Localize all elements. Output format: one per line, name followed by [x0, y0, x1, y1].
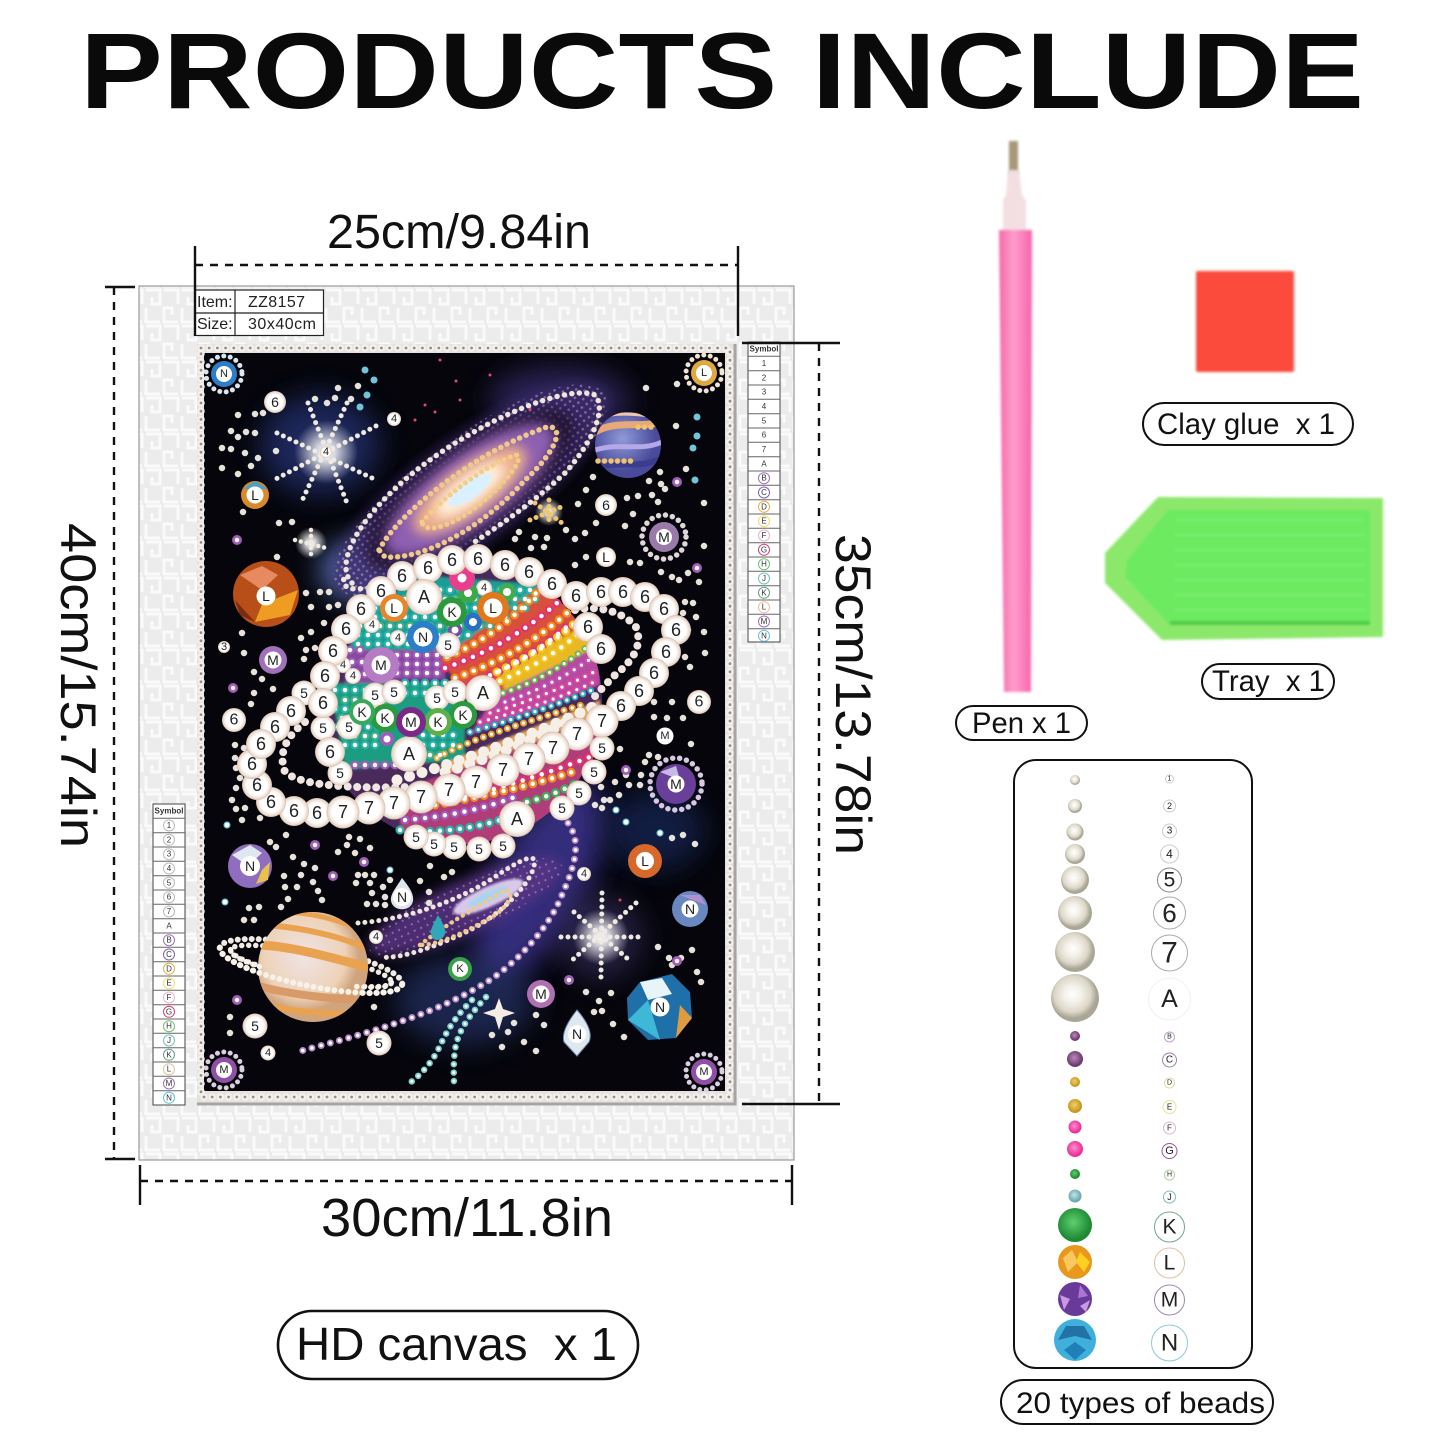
artwork: space painting [197, 344, 737, 1104]
big pearl beads with 7: 7 [572, 724, 582, 744]
coloured gem beads on the planet: N [418, 629, 428, 645]
lone 6 beads [222, 391, 711, 732]
corner gem M right [686, 1054, 722, 1090]
pearl 4 and L labels: 4 [323, 446, 329, 458]
gem: M ring lower: M [670, 776, 682, 792]
small pearl and gem details on planet: 4 [350, 670, 356, 682]
big pearl beads with 6: 6 [671, 620, 681, 640]
gem: M ring lower [650, 758, 702, 810]
big pearl beads with 7: 7 [471, 772, 481, 792]
symbol table right: Symbol [750, 344, 778, 354]
symbol table left: B [166, 936, 172, 945]
big pearl beads with 6: 6 [356, 599, 366, 619]
big pearl beads with 5: 5 [590, 764, 598, 780]
big pearl beads with 5: 5 [336, 765, 344, 781]
big pearl beads with 6: 6 [634, 681, 644, 701]
planet: striped blue top right [595, 412, 662, 478]
symbol letters column: F [1167, 1124, 1172, 1132]
symbol circles column [1148, 775, 1190, 1361]
planet: ringed Saturn [216, 912, 406, 1022]
gem: N droplet: N [397, 889, 407, 905]
big pearl beads with 7: 7 [444, 780, 454, 800]
symbol table right [748, 342, 780, 642]
scattered named gems [206, 355, 722, 1090]
big pearl beads with 5: 5 [575, 785, 583, 801]
pen translucent collar [1003, 170, 1026, 232]
label: HD canvas: HD canvas x 1 [296, 1318, 617, 1370]
big pearl beads with 5 [242, 632, 614, 1056]
pearl 4 and L labels: 4 [581, 868, 587, 880]
dimension: width 30cm: 30cm/11.8in [321, 1188, 613, 1248]
symbol table left: N [166, 1093, 172, 1102]
symbol letters column [1161, 776, 1178, 1356]
big A pearls: A [511, 809, 523, 829]
coloured gem beads on the planet: K [447, 604, 457, 620]
gem: N teardrop: N [572, 1026, 582, 1042]
symbol table right: B [761, 474, 767, 483]
lone 6 beads: 6 [230, 712, 239, 728]
pearl 4 and L labels: 4 [265, 1047, 271, 1059]
lone 6 beads: 6 [271, 394, 279, 410]
symbol table left: 7 [167, 907, 172, 916]
symbol table left: J [167, 1036, 171, 1045]
big pearl beads with 7: 7 [524, 749, 534, 769]
item and size table: Item: [197, 294, 233, 311]
big pearl beads with 5: 5 [390, 684, 398, 700]
bead M purple gem [1058, 1282, 1092, 1316]
big pearl beads with 5: 5 [300, 685, 308, 701]
big pearl beads with 5: 5 [412, 829, 420, 845]
tray [1105, 497, 1383, 640]
big pearl beads with 6: 6 [500, 555, 510, 575]
dimension: height 35cm [742, 343, 881, 1104]
big pearl beads with 5: 5 [345, 719, 353, 735]
canvas paper sheet [139, 286, 794, 1160]
big pearl beads with 6: 6 [397, 566, 407, 586]
gem: L orange: L [641, 853, 649, 869]
dimension: width 30cm [140, 1165, 792, 1248]
gem: M pink [527, 980, 555, 1008]
clay glue block [1196, 271, 1294, 372]
sparkle stars [274, 403, 640, 1030]
planet: faceted orange L: L [262, 588, 270, 604]
coloured gem beads on the planet: M [375, 657, 387, 673]
symbol table right: 6 [762, 431, 767, 440]
big pearl beads with 6: 6 [571, 586, 581, 606]
big pearl beads with 6: 6 [328, 641, 338, 661]
symbol table right: J [762, 574, 766, 583]
gem: N droplet [391, 878, 413, 909]
small pearl and gem details on planet: 4 [340, 659, 346, 671]
big A pearls: A [403, 744, 415, 764]
symbol letters column: 6 [1162, 898, 1177, 928]
small pearl and gem details on planet: 4 [395, 632, 401, 644]
gem: L small [241, 481, 269, 509]
pearl border [201, 348, 730, 1097]
big pearl beads with 7: 7 [597, 711, 607, 731]
small pearl and gem details on planet: 4 [369, 619, 375, 631]
big A pearls: A [418, 587, 430, 607]
big pearl beads with 5: 5 [375, 1035, 383, 1051]
big pearl beads with 5: 5 [433, 690, 441, 706]
symbol letters column: 2 [1167, 801, 1172, 811]
big pearl beads with 5: 5 [251, 1018, 259, 1034]
scattered pearl dots [222, 384, 705, 1051]
big pearl beads with 6: 6 [596, 639, 606, 659]
pen pink barrel [999, 230, 1032, 692]
symbol table left: H [166, 1022, 172, 1031]
gem: N teardrop [563, 1010, 590, 1056]
big pearl beads with 5: 5 [558, 800, 566, 816]
coloured gem beads on the planet: K [433, 714, 443, 730]
symbol letters column: 1 [1168, 776, 1172, 782]
label: 20 types of beads [1001, 1380, 1273, 1424]
gem: N purple facet [228, 844, 272, 888]
big pearl beads with 6: 6 [640, 587, 650, 607]
gem: N blue large [627, 974, 692, 1040]
gem: K green [448, 957, 472, 981]
big pearl beads with 6: 6 [649, 663, 659, 683]
big pearl beads with 6: 6 [596, 582, 606, 602]
symbol letters column: D [1167, 1080, 1172, 1086]
bead L amber gem [1058, 1245, 1092, 1279]
dimension: width 25cm: 25cm/9.84in [327, 206, 591, 259]
big pearl beads with 5: 5 [499, 838, 507, 854]
symbol table right: 5 [762, 416, 767, 425]
corner gem N: N [220, 368, 228, 380]
bead bands [335, 590, 590, 831]
symbol letters column: G [1165, 1145, 1174, 1157]
symbol table right: E [761, 517, 767, 526]
bead K green [1058, 1208, 1092, 1242]
coloured gem beads on the planet: M [405, 714, 417, 730]
planet: faceted orange L [233, 561, 299, 627]
coloured gem beads on the planet: L [489, 600, 497, 616]
big pearl beads with 6: 6 [266, 792, 276, 812]
corner gem L: L [701, 367, 707, 379]
symbol table right: 3 [762, 388, 767, 397]
small pearl and gem details on planet: 4 [481, 582, 487, 594]
gem: N small facet [672, 891, 708, 927]
big pearl beads with 6: 6 [376, 581, 386, 601]
dimension: height 35cm: 35cm/13.78in [825, 534, 881, 855]
pearl 4 and L labels: 4 [391, 413, 397, 425]
symbol letters column: 5 [1164, 868, 1175, 892]
pen metal tip [1009, 141, 1018, 175]
symbol table left: 4 [167, 864, 172, 873]
big pearl beads with 7: 7 [338, 802, 348, 822]
symbol table right: 4 [762, 402, 767, 411]
big pearl beads with 6: 6 [325, 742, 335, 762]
symbol table left: C [166, 950, 172, 959]
symbol table right: L [762, 603, 767, 612]
symbol table right: C [761, 488, 767, 497]
gem: M ring [642, 515, 686, 559]
big pearl beads with 6: 6 [247, 754, 257, 774]
corner gem M right: M [699, 1066, 709, 1078]
big pearl beads with 7: 7 [364, 798, 374, 818]
symbol table left: F [167, 993, 172, 1002]
label: pen: Pen x 1 [972, 707, 1071, 740]
symbol table left: A [166, 921, 172, 930]
title: PRODUCTS INCLUDE [80, 10, 1364, 131]
symbol table left [153, 804, 185, 1105]
symbol table left: Symbol [155, 806, 183, 816]
symbol table left: E [166, 979, 172, 988]
symbol letters column: J [1167, 1192, 1172, 1202]
symbol table right: F [762, 531, 767, 540]
big pearl beads with 7: 7 [416, 787, 426, 807]
gem: L small: L [251, 487, 259, 503]
item and size table: Size: [197, 316, 233, 333]
gem: M purple [259, 646, 287, 674]
big pearl beads with 5: 5 [475, 841, 483, 857]
item and size table: ZZ8157 [248, 294, 305, 311]
big pearl beads with 5: 5 [371, 687, 379, 703]
panel: bead legend [1014, 760, 1252, 1368]
big pearl beads with 6: 6 [447, 550, 457, 570]
coloured gem beads on the planet: L [390, 600, 398, 616]
label: clay glue [1143, 403, 1353, 445]
coloured small beads column [1067, 1031, 1083, 1202]
big pearl beads with 5: 5 [430, 836, 438, 852]
symbol table right: 2 [762, 373, 767, 382]
symbol table left: 2 [167, 835, 172, 844]
label: HD canvas [278, 1311, 638, 1379]
gem: M small [656, 728, 674, 744]
symbol letters column: A [1161, 985, 1178, 1013]
corner gem M left [206, 1052, 242, 1088]
big pearl beads with 6: 6 [473, 549, 483, 569]
big pearl beads with 6: 6 [289, 801, 299, 821]
big pearl beads with 6: 6 [312, 803, 322, 823]
big pearl beads with 7: 7 [548, 738, 558, 758]
symbol letters column: E [1167, 1102, 1172, 1112]
item and size table [195, 290, 324, 336]
dimension: width 25cm [195, 206, 738, 336]
lone 6 beads: 6 [602, 497, 610, 513]
symbol table right: N [761, 631, 767, 640]
big pearl beads with 6: 6 [618, 582, 628, 602]
gem: M purple: M [267, 652, 279, 668]
symbol letters column: M [1161, 1288, 1178, 1312]
symbol table left: 3 [167, 850, 172, 859]
big pearl beads with 7: 7 [389, 793, 399, 813]
nebula glows [260, 368, 705, 1045]
symbol table left: L [167, 1065, 172, 1074]
big pearl beads with 6: 6 [318, 693, 328, 713]
pearl beads column [1051, 775, 1099, 1022]
symbol letters column: B [1167, 1034, 1172, 1040]
gem: M small: M [660, 730, 670, 742]
symbol table right: 1 [762, 359, 767, 368]
big pearl beads with 5: 5 [451, 684, 459, 700]
symbol letters column: 4 [1166, 847, 1173, 861]
big pearl beads with 6: 6 [252, 775, 262, 795]
bead N blue gem [1054, 1319, 1096, 1361]
gem: N blue large: N [655, 999, 665, 1015]
big pearl beads with 6: 6 [423, 558, 433, 578]
colour underlay [330, 575, 610, 860]
item and size table: 30x40cm [248, 316, 316, 333]
symbol table right: G [761, 545, 767, 554]
symbol table left: G [166, 1007, 172, 1016]
big pearl beads with 6: 6 [583, 617, 593, 637]
gem: N purple facet: N [245, 858, 255, 874]
pearl 4 and L labels: 3 [221, 641, 227, 653]
symbol table left: M [166, 1079, 173, 1088]
label: clay glue: Clay glue x 1 [1157, 408, 1335, 441]
symbol table right: H [761, 560, 767, 569]
lone 6 beads: 6 [695, 694, 704, 710]
coloured gem beads on the planet [349, 592, 509, 737]
pearl 4 and L labels [218, 412, 616, 1060]
big pearl beads with 6: 6 [547, 574, 557, 594]
symbol table left: D [166, 964, 172, 973]
big pearl beads with 5: 5 [598, 740, 606, 756]
spiral galaxy [330, 381, 610, 596]
symbol table right: M [761, 617, 768, 626]
corner gem L [686, 355, 722, 391]
big A pearls: A [477, 683, 489, 703]
small pearl and gem details on planet [335, 565, 516, 746]
big pearl beads with 6: 6 [320, 666, 330, 686]
big pearl beads with 6: 6 [256, 734, 266, 754]
symbol table right: K [761, 588, 767, 597]
coloured gem beads on the planet: K [458, 707, 468, 723]
big pearl beads with 6: 6 [341, 619, 351, 639]
symbol table right: 7 [762, 445, 767, 454]
gem: L orange [628, 844, 662, 878]
gem: M pink: M [535, 986, 547, 1002]
big pearl beads with 7: 7 [498, 760, 508, 780]
big pearl beads with 7 [326, 704, 618, 828]
big pearl beads with 6: 6 [524, 562, 534, 582]
label: tray: Tray x 1 [1212, 665, 1325, 698]
symbol letters column: N [1161, 1330, 1178, 1356]
big pearl beads with 6: 6 [286, 701, 296, 721]
symbol letters column: K [1162, 1216, 1177, 1238]
gem: N small facet: N [685, 901, 695, 917]
gem: teal droplet [431, 915, 445, 940]
coloured gem beads on the planet: K [357, 704, 367, 720]
big pearl beads with 5: 5 [319, 720, 327, 736]
big pearl beads with 6 [237, 544, 691, 828]
pearl rows inside ring [397, 707, 593, 780]
symbol table left: 1 [167, 821, 172, 830]
symbol letters column: H [1167, 1172, 1172, 1178]
corner gem N [206, 356, 242, 392]
big pearl beads with 6: 6 [270, 717, 280, 737]
gem: M ring: M [658, 529, 670, 545]
coloured small dots [225, 360, 697, 1000]
lower galaxy [297, 823, 576, 1087]
big pearl beads with 6: 6 [659, 599, 669, 619]
symbol letters column: C [1166, 1054, 1173, 1066]
big pearl beads with 6: 6 [661, 642, 671, 662]
symbol letters column: 7 [1161, 936, 1178, 970]
symbol letters column: L [1164, 1252, 1175, 1274]
symbol table left: K [166, 1050, 172, 1059]
coloured gem beads on the planet: K [380, 710, 390, 726]
corner gem M left: M [219, 1064, 229, 1076]
symbol table right: D [761, 502, 767, 511]
dimension: height 40cm [50, 287, 135, 1159]
symbol table left: 6 [167, 893, 172, 902]
pearl 4 and L labels: L [602, 549, 610, 565]
dimension: height 40cm: 40cm/15.74in [50, 523, 106, 848]
big A pearls [391, 579, 535, 837]
big pearl beads with 6: 6 [616, 696, 626, 716]
inner ring strings [575, 608, 638, 702]
label: 20 types of beads: 20 types of beads [1016, 1387, 1265, 1420]
symbol letters column: 3 [1167, 826, 1173, 836]
symbol table right: A [761, 459, 767, 468]
symbol table left: 5 [167, 878, 172, 887]
planet: big rainbow body [282, 560, 638, 860]
gem: K green: K [456, 963, 464, 975]
pearl 4 and L labels: 4 [373, 931, 379, 943]
big pearl beads with 5: 5 [450, 839, 458, 855]
big pearl beads with 5: 5 [444, 637, 452, 653]
pen tool [999, 141, 1032, 692]
